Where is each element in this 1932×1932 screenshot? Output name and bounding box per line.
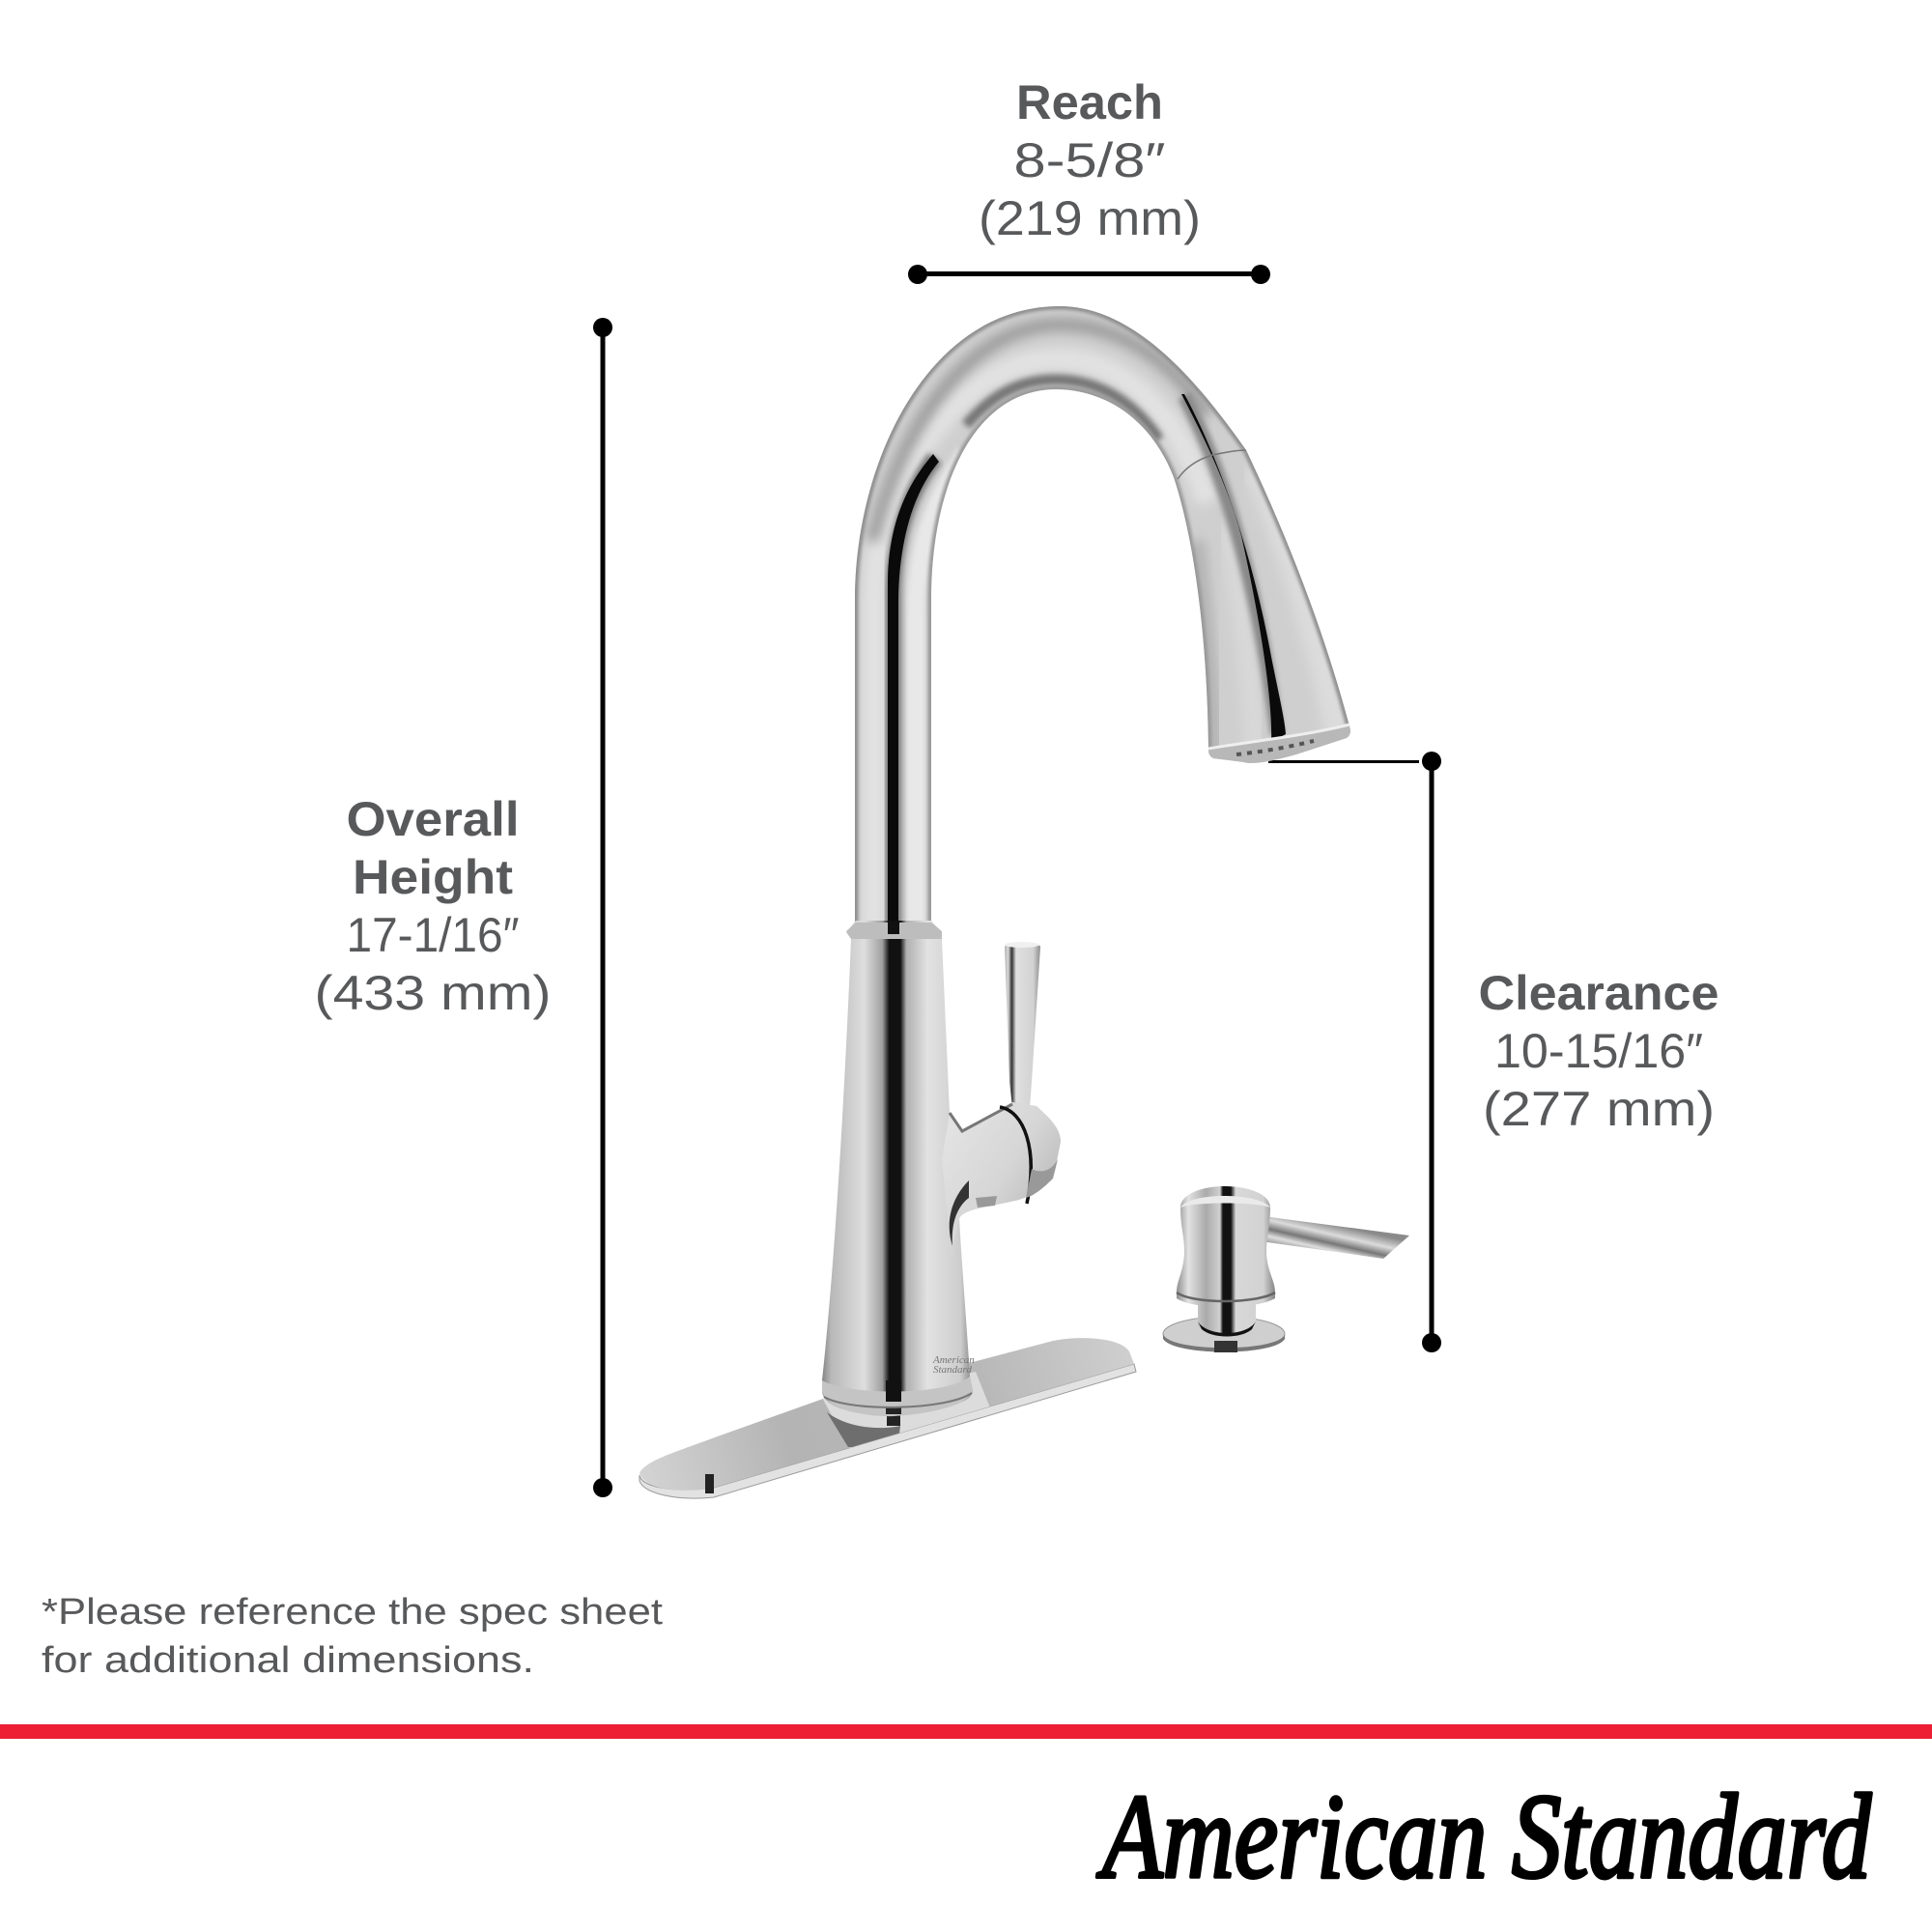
dimension: overall height	[315, 318, 612, 1497]
dispenser neck	[1198, 1302, 1256, 1335]
clearance label: 10-15/16″	[1494, 1024, 1703, 1078]
clearance label: (277 mm)	[1483, 1082, 1715, 1136]
product: spout	[850, 299, 1357, 937]
overall height label: 17-1/16″	[346, 908, 520, 962]
dark streak left	[888, 454, 939, 932]
product: faucet body	[822, 921, 975, 1416]
footnote	[42, 1592, 664, 1681]
dispenser head	[1177, 1186, 1275, 1307]
dark streak halo	[893, 458, 935, 932]
clearance label	[1478, 966, 1719, 1136]
dimension: reach	[908, 75, 1270, 284]
overall height label: Overall	[346, 792, 520, 846]
spray head face	[1208, 724, 1351, 763]
overall height label: Height	[353, 850, 513, 904]
reach label: 8-5/8″	[1014, 133, 1165, 187]
product: deck plate	[639, 1338, 1136, 1498]
dimension: clearance	[1268, 752, 1719, 1352]
logo engraved on faucet base: Standard	[933, 1364, 972, 1376]
reach label	[979, 75, 1201, 245]
spout edge shading	[855, 306, 1350, 932]
dark streak right halo	[1184, 396, 1277, 734]
pump arm	[1249, 1215, 1409, 1259]
reach label: (219 mm)	[979, 191, 1201, 245]
logo engraved on faucet base	[932, 1354, 975, 1376]
reach dimension line	[908, 265, 1270, 284]
product: lever handle	[942, 942, 1061, 1256]
dark streak right	[1181, 394, 1286, 742]
logo engraved on faucet base: American	[932, 1354, 975, 1366]
footnote: for additional dimensions.	[42, 1640, 534, 1681]
footnote: *Please reference the spec sheet	[42, 1592, 664, 1633]
clearance label: Clearance	[1478, 966, 1719, 1020]
plate reflection	[821, 1372, 995, 1449]
dispenser base	[1163, 1317, 1285, 1351]
overall height dimension line	[593, 318, 612, 1497]
clearance dimension line	[1268, 752, 1441, 1352]
product: soap dispenser	[1163, 1186, 1409, 1352]
red divider bar	[0, 1724, 1932, 1739]
reach label: Reach	[1016, 75, 1163, 129]
overall height label	[315, 792, 551, 1020]
spout tonal bands	[874, 359, 1208, 932]
overall height label: (433 mm)	[315, 966, 551, 1020]
